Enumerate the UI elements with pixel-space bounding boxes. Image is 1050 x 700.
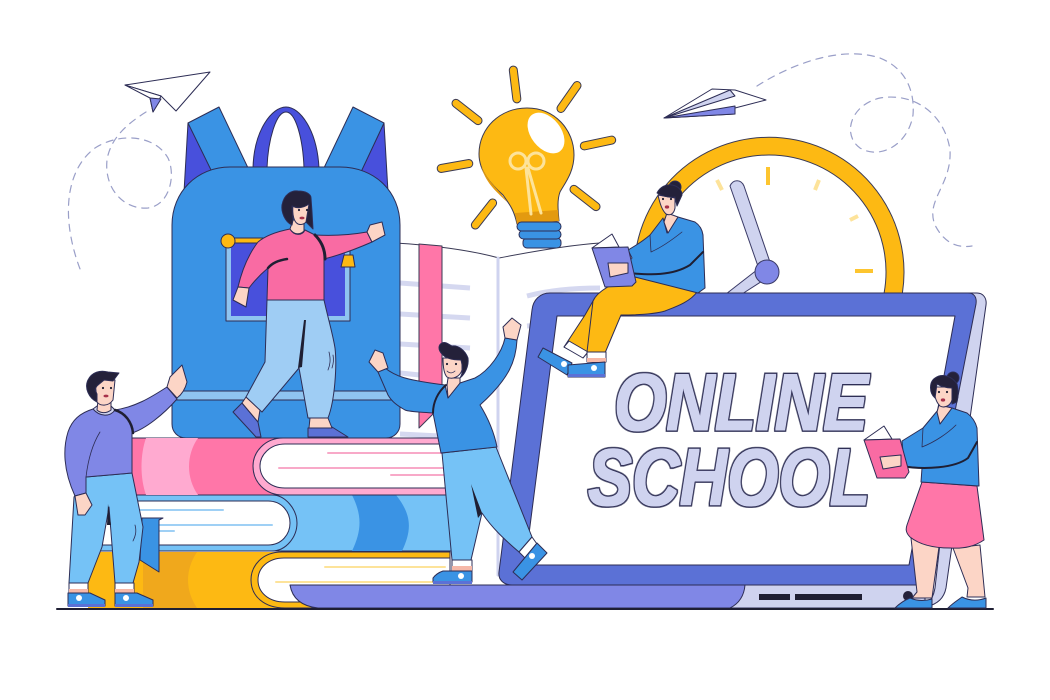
backpack strip bbox=[173, 391, 399, 400]
clock hands bbox=[726, 181, 779, 294]
person: boy cheering bbox=[369, 318, 547, 584]
book in hands bbox=[592, 234, 619, 248]
pink book bbox=[864, 426, 892, 440]
middle blue book bbox=[100, 495, 455, 572]
head and hair bbox=[937, 405, 952, 424]
shoes bbox=[538, 348, 572, 375]
title text: SCHOOL bbox=[588, 433, 870, 523]
title text: ONLINE bbox=[614, 358, 870, 448]
backpack pocket bbox=[226, 243, 350, 321]
clock ring bbox=[634, 137, 904, 293]
pink bookmark bbox=[419, 244, 442, 428]
head and hair bbox=[97, 400, 111, 413]
laptop screen frame bbox=[499, 293, 976, 585]
laptop back edge bbox=[926, 293, 986, 607]
legs bbox=[911, 538, 939, 598]
laptop base bbox=[480, 585, 925, 608]
hands bbox=[367, 222, 385, 242]
sweater bbox=[628, 217, 705, 293]
legs bbox=[442, 447, 532, 560]
laptop bbox=[290, 293, 986, 608]
shoes bbox=[895, 598, 932, 608]
top pink book bbox=[132, 438, 450, 495]
skirt bbox=[906, 482, 984, 548]
hands bbox=[167, 365, 187, 398]
hands bbox=[503, 318, 521, 340]
light bulb rays bbox=[437, 66, 616, 231]
sweater bbox=[378, 338, 517, 453]
legs bbox=[564, 301, 593, 357]
sweater bbox=[238, 229, 372, 300]
socks and shoes bbox=[69, 583, 134, 593]
clock bbox=[634, 137, 904, 294]
head and hair bbox=[664, 213, 678, 233]
dashed flight path right bbox=[757, 54, 972, 247]
person: woman in pink sweater bbox=[233, 191, 385, 437]
shoes bbox=[433, 571, 472, 582]
person: woman with pink book bbox=[864, 372, 986, 608]
backpack bbox=[172, 107, 400, 438]
head and hair bbox=[290, 220, 304, 234]
paper plane left bbox=[125, 72, 210, 112]
shoes bbox=[233, 403, 261, 437]
person: boy with purple sweater bbox=[65, 365, 187, 607]
open book behind bbox=[395, 243, 600, 580]
sweater bbox=[65, 387, 177, 496]
clock ticks bbox=[717, 167, 873, 271]
trousers bbox=[69, 473, 143, 583]
bottom yellow book bbox=[88, 552, 450, 608]
laptop keys bbox=[759, 594, 862, 600]
person: woman sitting on laptop bbox=[538, 181, 705, 377]
book text lines bbox=[400, 283, 600, 436]
title text bbox=[588, 358, 870, 523]
pants bbox=[246, 300, 336, 418]
paper plane right bbox=[664, 89, 766, 118]
dashed flight path left bbox=[68, 112, 171, 274]
book stack bbox=[88, 438, 455, 608]
light bulb bbox=[479, 106, 574, 248]
sweater bbox=[900, 408, 979, 486]
head and hair bbox=[447, 378, 460, 398]
ground line bbox=[57, 608, 993, 610]
